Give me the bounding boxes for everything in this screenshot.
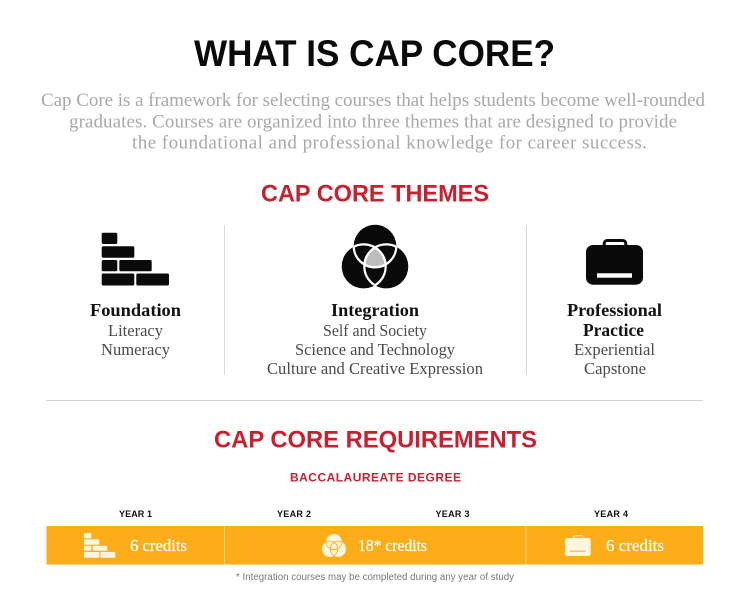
integration list: Science and Technology [295, 340, 456, 359]
year labels: YEAR 4 [594, 509, 628, 519]
year 4 credits: 6 credits [606, 536, 664, 555]
panel: foundation [90, 233, 181, 359]
professional practice list: Capstone [584, 359, 646, 378]
intro paragraph: the foundational and professional knowledge for career success. [132, 132, 647, 154]
icon: small venn diagram [322, 534, 346, 557]
intro paragraph [41, 90, 706, 154]
icon: brick steps [102, 233, 169, 286]
professional practice heading: Practice [583, 320, 644, 340]
title: WHAT IS CAP CORE? [194, 33, 555, 74]
heading: cap core themes: CAP CORE THEMES [261, 180, 489, 208]
years 2-3 credits: 18* credits [358, 536, 427, 555]
year labels: YEAR 1 [119, 509, 152, 519]
icon: venn diagram [342, 225, 408, 288]
year labels: YEAR 2 [277, 509, 311, 519]
intro paragraph: graduates. Courses are organized into three themes that are designed to provide [69, 112, 677, 132]
footnote: * Integration courses may be completed during any year of study [236, 572, 514, 583]
professional practice heading [567, 300, 662, 340]
credits bar [46, 526, 703, 564]
subheading: baccalaureate degree: BACCALAUREATE DEGREE [290, 471, 461, 485]
icon: small briefcase [565, 536, 591, 556]
icon: small brick steps [84, 533, 115, 558]
integration list: Self and Society [323, 321, 428, 340]
icon: briefcase [586, 240, 643, 285]
infographic canvas [42, 40, 705, 582]
integration list [267, 321, 483, 378]
panel: professional practice [567, 240, 662, 378]
heading: cap core requirements: CAP CORE REQUIREMENTS [214, 426, 537, 454]
foundation heading: Foundation [90, 300, 181, 320]
year 1 credits: 6 credits [130, 536, 187, 555]
year labels [119, 509, 628, 519]
integration list: Culture and Creative Expression [267, 359, 483, 378]
professional practice list: Experiential [574, 340, 655, 359]
integration heading: Integration [331, 300, 419, 320]
foundation list [101, 321, 171, 359]
panel: integration [267, 225, 483, 378]
foundation list: Numeracy [101, 340, 171, 359]
professional practice heading: Professional [567, 300, 662, 320]
foundation list: Literacy [108, 321, 164, 340]
year labels: YEAR 3 [436, 509, 470, 519]
intro paragraph: Cap Core is a framework for selecting courses that helps students become well-rounded [41, 90, 706, 111]
professional practice list [574, 340, 655, 378]
